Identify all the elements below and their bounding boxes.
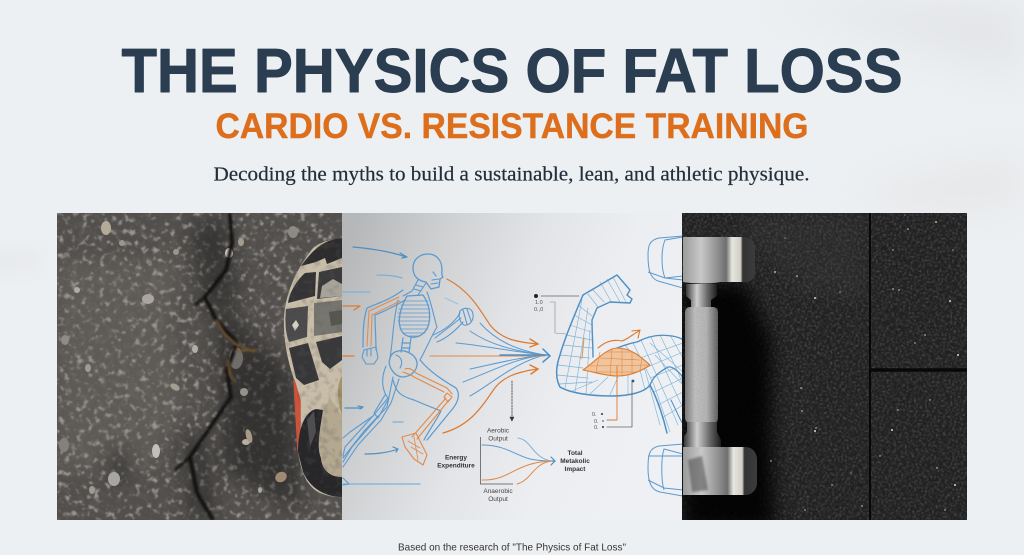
- top weight head: [683, 237, 755, 284]
- footer source line: Based on the research of "The Physics of Fat Loss": [398, 542, 626, 554]
- energy expenditure flow chart: [437, 428, 590, 503]
- rear arm: [363, 290, 405, 350]
- flexed arm wireframe: [541, 275, 683, 433]
- callout markers: 0.: [594, 425, 599, 431]
- rear leg: [343, 377, 399, 467]
- panel: gym floor photo with dumbbell: [682, 213, 967, 530]
- chart labels: Impact: [565, 466, 586, 473]
- dotted down arrow: [512, 380, 513, 416]
- wireframe mesh: [557, 277, 683, 432]
- front arm: [433, 313, 463, 342]
- bottom weight head: [683, 447, 757, 495]
- chart labels: Expenditure: [437, 462, 475, 470]
- biceps muscle: [583, 348, 650, 376]
- dumbbell wireframe heads: [648, 236, 683, 496]
- panel: asphalt photo with running shoe: [57, 213, 342, 520]
- ribcage: [398, 295, 430, 337]
- chart labels: Output: [488, 496, 508, 503]
- main arrow to arm: [500, 354, 549, 356]
- neck and spine: [403, 280, 426, 296]
- lower orange curve: [443, 369, 537, 433]
- chart labels: Total: [567, 450, 583, 457]
- front leg outline: [393, 360, 458, 440]
- panel: anatomical diagram: [342, 213, 683, 520]
- rubber floor: [682, 213, 967, 530]
- triceps accent and rising arrow: [580, 338, 584, 358]
- chart labels: Energy: [445, 454, 467, 462]
- callout markers: 0.: [594, 419, 599, 425]
- runner orange bones: [367, 297, 452, 465]
- torso contours: [390, 292, 437, 360]
- subtitle: CARDIO VS. RESISTANCE TRAINING: [216, 107, 808, 146]
- chart labels: [437, 428, 590, 503]
- runner skeleton: [343, 254, 473, 485]
- callout leaders: [540, 296, 580, 297]
- knurled handle: [685, 307, 718, 423]
- diagram background: [342, 213, 588, 520]
- skull: [413, 254, 443, 289]
- arrows flowing toward the runner: [343, 247, 420, 484]
- chart labels: Anaerobic: [483, 488, 513, 495]
- chart axes: [480, 437, 513, 484]
- lower collar: [684, 422, 721, 449]
- title: THE PHYSICS OF FAT LOSS: [122, 37, 902, 106]
- chart labels: Output: [488, 436, 508, 442]
- pelvis: [389, 351, 417, 377]
- pavement crack: [175, 213, 258, 520]
- chart curves: [482, 438, 555, 484]
- callout markers: 0.: [592, 412, 597, 418]
- callout markers: 1.0: [535, 300, 543, 306]
- asphalt surface: [57, 213, 342, 520]
- arm outline: [557, 295, 667, 433]
- tagline: Decoding the myths to build a sustainable, lean, and athletic physique.: [214, 164, 810, 186]
- chart labels: Aerobic: [487, 428, 510, 434]
- callout markers: 0.,0: [534, 307, 543, 313]
- dumbbell: [683, 237, 757, 495]
- callout markers: [534, 294, 634, 431]
- converging energy lines: [430, 279, 550, 433]
- upper collar: [686, 284, 717, 309]
- floor speckles: [770, 214, 959, 511]
- running shoe sole: [284, 238, 342, 498]
- floor tile seams: [869, 213, 871, 520]
- upper orange curve: [447, 279, 537, 344]
- chart labels: Metakolic: [560, 458, 590, 465]
